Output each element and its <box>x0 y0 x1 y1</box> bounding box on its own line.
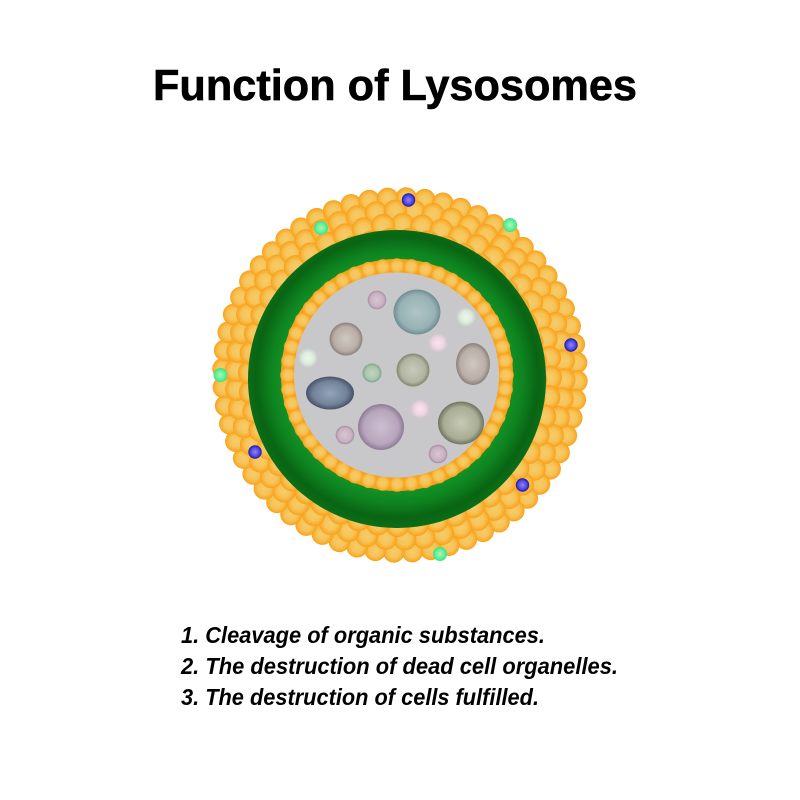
inner ring of small orange beads <box>270 248 524 502</box>
blue membrane proteins <box>248 193 578 492</box>
outer layer of orange beads <box>178 155 613 592</box>
title: Function of Lysosomes <box>153 61 637 110</box>
green ring <box>248 230 546 528</box>
vesicles inside lumen <box>298 290 490 463</box>
green membrane proteins <box>214 218 517 561</box>
list of functions <box>180 622 618 710</box>
list of functions: 2. The destruction of dead cell organelles. <box>180 653 618 679</box>
diagram: lysosome <box>178 155 613 592</box>
list of functions: 1. Cleavage of organic substances. <box>181 622 545 648</box>
list of functions: 3. The destruction of cells fulfilled. <box>181 684 539 710</box>
grey lumen <box>294 272 499 478</box>
